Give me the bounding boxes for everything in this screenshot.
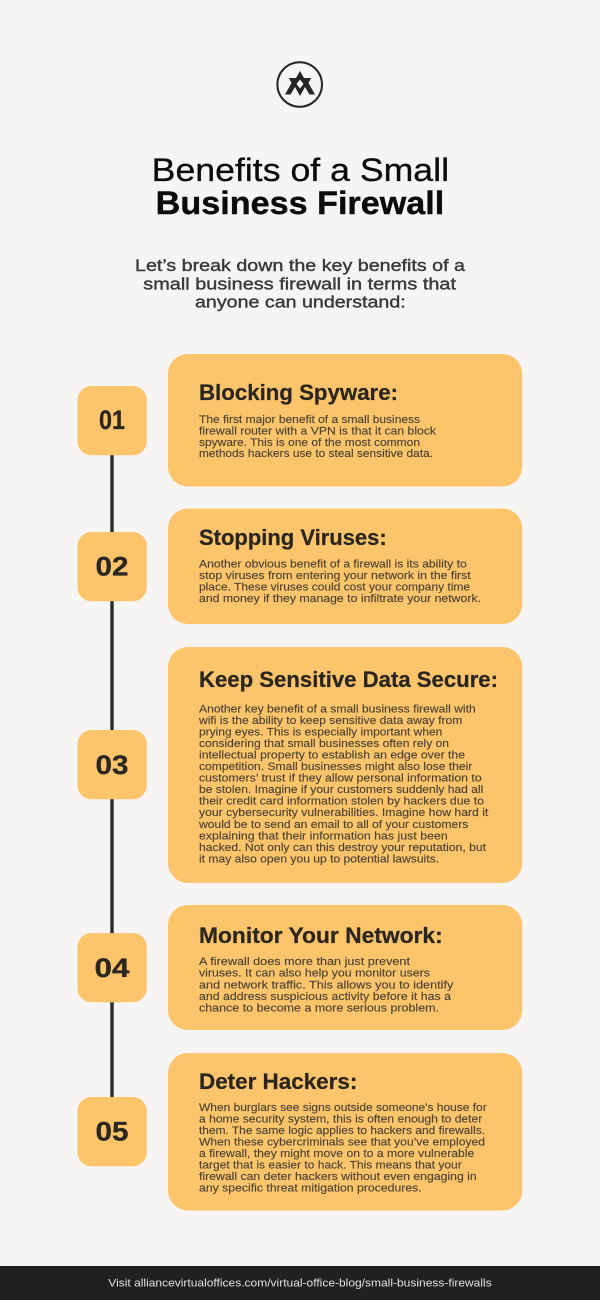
body text: chance to become a more serious problem. xyxy=(199,1003,439,1015)
body text: and address suspicious activity before it has a xyxy=(199,991,452,1003)
step badge 02 xyxy=(78,532,147,601)
body text: stop viruses from entering your network in the first xyxy=(199,570,472,582)
step badge 04: 04 xyxy=(94,953,130,983)
body text: and money if they manage to infiltrate your network. xyxy=(199,593,481,605)
heading: Stopping Viruses: xyxy=(199,525,387,550)
body text: When these cybercriminals see that you’ve employed xyxy=(199,1137,485,1149)
body text: be stolen. Imagine if your customers suddenly had all xyxy=(199,784,483,796)
step badge 01 xyxy=(78,386,147,455)
body text: it may also open you up to potential lawsuits. xyxy=(199,853,439,865)
panel: stopping viruses xyxy=(168,508,522,624)
body text: intellectual property to establish an edge over the xyxy=(199,750,465,762)
body text: a firewall, they might move on to a more vulnerable xyxy=(199,1148,474,1160)
body text xyxy=(199,1102,487,1195)
body text: a home security system, this is often enough to deter xyxy=(199,1114,483,1126)
heading: Monitor Your Network: xyxy=(199,923,443,948)
body text xyxy=(199,414,436,460)
body text: firewall can deter hackers without even engaging in xyxy=(199,1171,477,1183)
icon: logo xyxy=(277,62,322,107)
body text xyxy=(199,558,481,605)
step badge 05: 05 xyxy=(96,1116,128,1146)
body text xyxy=(198,703,489,865)
panel: deter hackers xyxy=(168,1053,522,1210)
body text: considering that small businesses often rely on xyxy=(199,738,449,750)
body text: them. The same logic applies to hackers and firewalls. xyxy=(199,1125,485,1137)
body text: The first major benefit of a small business xyxy=(199,414,420,426)
body text: methods hackers use to steal sensitive data. xyxy=(199,448,433,460)
body text: place. These viruses could cost your company time xyxy=(199,581,470,593)
body text: your cybersecurity vulnerabilities. Imagine how hard it xyxy=(199,807,489,819)
panel: keep sensitive data secure xyxy=(168,647,522,883)
body text: firewall router with a VPN is that it can block xyxy=(199,425,436,437)
body text xyxy=(199,956,454,1015)
timeline connector xyxy=(110,450,114,1100)
body text: When burglars see signs outside someone's house for xyxy=(199,1102,487,1114)
step badge 05 xyxy=(78,1097,147,1166)
body text: spyware. This is one of the most common xyxy=(199,437,420,449)
footer bar xyxy=(0,1266,600,1300)
title: Business Firewall xyxy=(156,185,444,221)
body text: target that is easier to hack. This means that your xyxy=(199,1160,462,1172)
step badge 03: 03 xyxy=(96,750,128,780)
heading: Deter Hackers: xyxy=(199,1069,357,1094)
body text: prying eyes. This is especially important when xyxy=(199,726,442,738)
body text: viruses. It can also help you monitor users xyxy=(199,968,430,980)
intro text xyxy=(135,257,466,312)
intro text: anyone can understand: xyxy=(195,294,406,312)
body text: A firewall does more than just prevent xyxy=(199,956,411,968)
title xyxy=(152,152,449,221)
intro text: small business firewall in terms that xyxy=(143,275,456,293)
body text: and network traffic. This allows you to identify xyxy=(199,979,454,991)
body text: would be to send an email to all of your customers xyxy=(198,819,469,831)
body text: Another key benefit of a small business firewall with xyxy=(199,703,476,715)
step badge 03 xyxy=(78,730,147,799)
footer bar: Visit alliancevirtualoffices.com/virtual-office-blog/small-business-firewalls xyxy=(108,1278,492,1290)
body text: customers’ trust if they allow personal information to xyxy=(199,773,482,785)
step badge 04 xyxy=(78,933,147,1002)
step badge 02: 02 xyxy=(96,552,128,582)
body text: wifi is the ability to keep sensitive data away from xyxy=(198,715,462,727)
panel: blocking spyware xyxy=(168,354,522,486)
title: Benefits of a Small xyxy=(152,152,449,188)
panel: monitor your network xyxy=(168,905,522,1030)
intro text: Let’s break down the key benefits of a xyxy=(135,257,466,275)
body text: explaining that their information has just been xyxy=(199,830,448,842)
body text: hacked. Not only can this destroy your reputation, but xyxy=(199,842,487,854)
body text: Another obvious benefit of a firewall is its ability to xyxy=(199,558,467,570)
heading: Keep Sensitive Data Secure: xyxy=(199,667,498,692)
heading: Blocking Spyware: xyxy=(199,380,398,405)
body text: their credit card information stolen by hackers due to xyxy=(199,796,484,808)
body text: any specific threat mitigation procedures. xyxy=(199,1183,422,1195)
body text: competition. Small businesses might also lose their xyxy=(199,761,473,773)
step badge 01: 01 xyxy=(99,405,125,435)
